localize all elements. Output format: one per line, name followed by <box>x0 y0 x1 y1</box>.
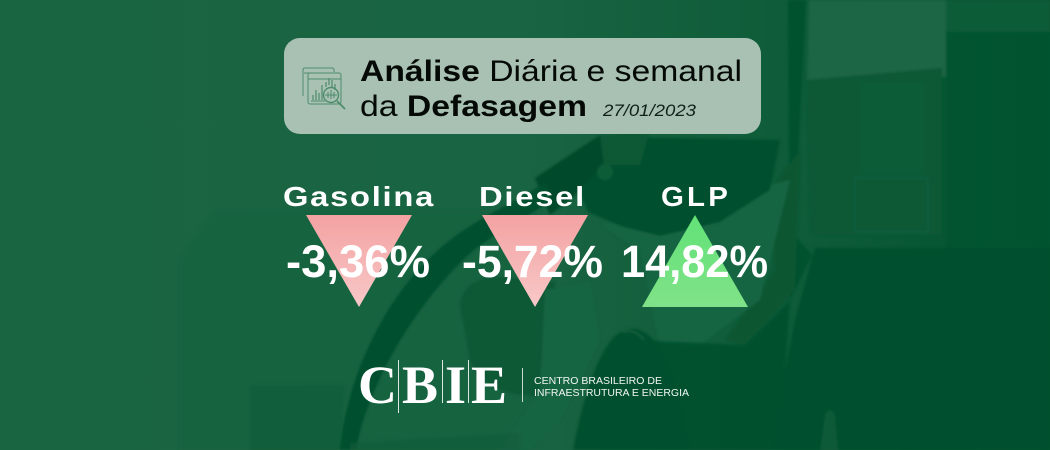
panel: Diesel <box>462 181 603 307</box>
value: GLP: 14,82% <box>621 236 768 287</box>
logo tagline: INFRAESTRUTURA E ENERGIA <box>534 387 689 399</box>
panel: GLP <box>621 181 768 307</box>
panel: title card <box>284 38 761 134</box>
label: GLP: GLP <box>661 181 731 212</box>
logo tagline: CENTRO BRASILEIRO DE <box>534 375 662 387</box>
icon: analytics windows with magnifier <box>303 68 345 109</box>
panel: Gasolina <box>283 181 435 307</box>
logo: CBIE: B <box>402 355 438 415</box>
arrow: down triangle <box>306 215 412 307</box>
heading line 1: Análise Diária e semanal <box>360 55 742 88</box>
logo: CBIE: C <box>358 355 397 415</box>
date: 27/01/2023 <box>602 102 697 120</box>
logo: CBIE: I <box>445 355 466 415</box>
logo tagline <box>534 375 689 399</box>
logo: CBIE: E <box>471 355 507 415</box>
arrow: down triangle <box>482 215 588 307</box>
heading line 2: da Defasagem <box>360 90 587 123</box>
arrow: up triangle <box>642 215 748 307</box>
value: diesel: -5,72% <box>462 236 603 287</box>
value: gasolina: -3,36% <box>286 236 430 287</box>
logo: CBIE <box>358 355 689 415</box>
label: Gasolina: Gasolina <box>283 181 435 212</box>
label: Diesel: Diesel <box>479 181 586 212</box>
